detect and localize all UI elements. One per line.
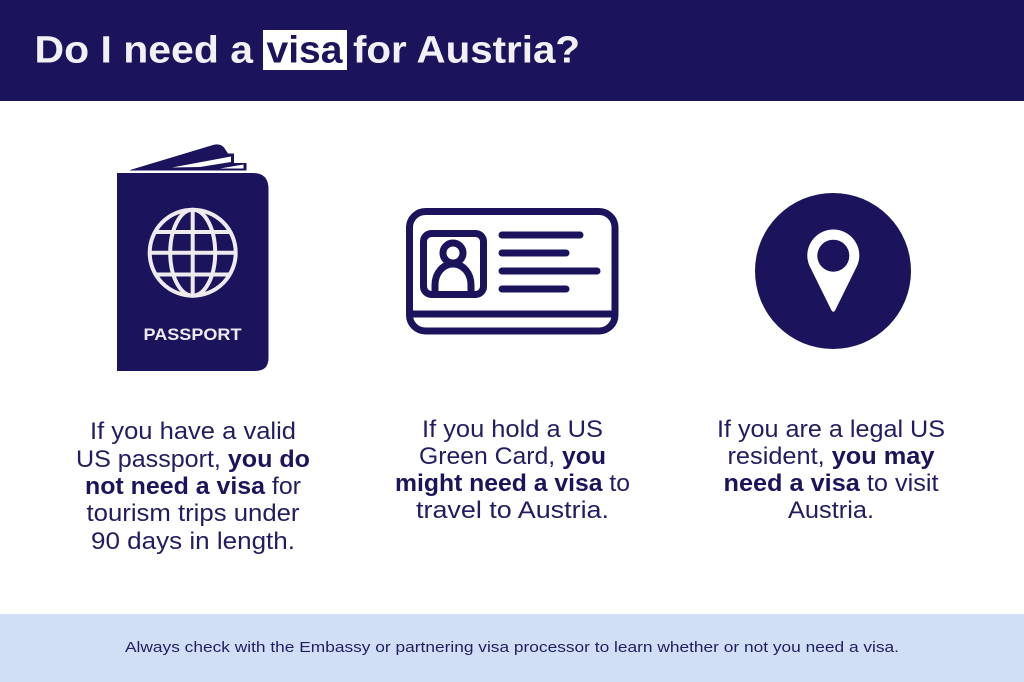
title (34, 29, 580, 71)
text: legal resident: If you are a legal US (717, 416, 945, 443)
icon: location pin (755, 193, 911, 349)
text: US passport (76, 418, 310, 555)
text: US passport: If you have a valid (90, 418, 296, 445)
header banner (0, 0, 1024, 101)
icon: green card (409, 212, 615, 331)
text: US passport: 90 days in length. (91, 528, 295, 555)
text: US passport: tourism trips under (86, 500, 300, 527)
title: for Austria? (353, 29, 580, 71)
title: visa (266, 29, 343, 71)
text: green card: Green Card, you (419, 443, 606, 470)
text: legal resident: resident, you may (728, 443, 935, 470)
title: Do I need a (34, 29, 254, 71)
icon: passport (117, 144, 268, 371)
footer note: Always check with the Embassy or partnering visa processor to learn whether or not you need a visa. (125, 639, 899, 656)
text: US passport: US passport, you do (76, 446, 310, 473)
text: green card: might need a visa to (395, 470, 630, 497)
text: US passport: not need a visa for (85, 473, 301, 500)
text: green card: If you hold a US (422, 416, 603, 443)
icon: passport: PASSPORT (144, 325, 242, 344)
text: legal resident: need a visa to visit (724, 470, 939, 497)
text: legal resident: Austria. (788, 497, 874, 524)
footer note (0, 614, 1024, 682)
text: green card: travel to Austria. (416, 497, 609, 524)
text: green card (395, 416, 630, 524)
text: legal resident (717, 416, 945, 524)
